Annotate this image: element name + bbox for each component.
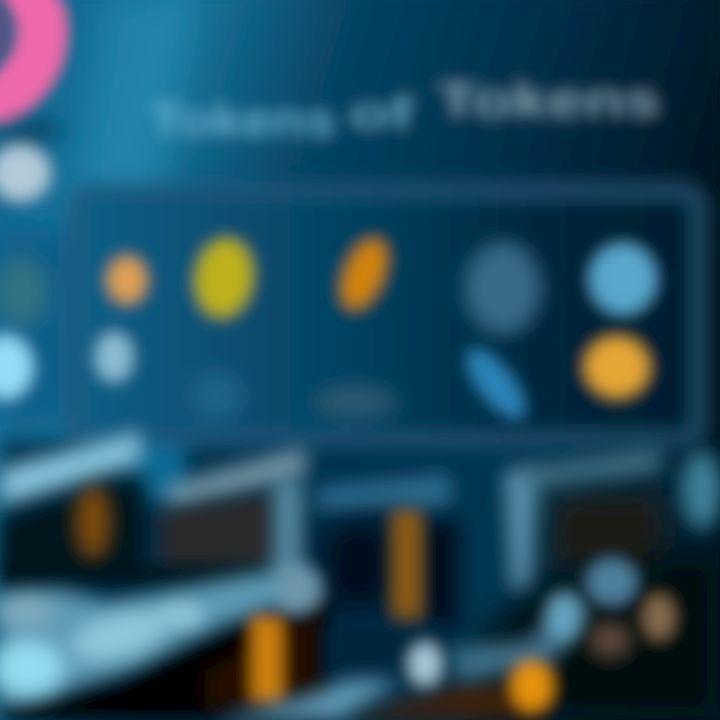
block: blue right of bar bbox=[325, 620, 445, 680]
icon: dark orange token bbox=[331, 231, 397, 317]
pillar: right bbox=[505, 470, 538, 590]
title: Tokens bbox=[150, 94, 335, 146]
node: top blue bbox=[586, 558, 638, 606]
darkness: lower left band bbox=[0, 565, 260, 585]
node: gold coin bbox=[510, 660, 554, 712]
node: tan left bbox=[588, 622, 632, 658]
icon: orange token bbox=[107, 256, 147, 304]
node: tan right bbox=[642, 593, 676, 641]
icon: teal-green glow bbox=[0, 256, 48, 328]
icon: gold coin bbox=[584, 336, 650, 398]
label placeholder: token one bbox=[190, 372, 242, 420]
brown strip: bottom bbox=[340, 680, 540, 720]
ledge: second bbox=[165, 448, 305, 508]
block: brown bbox=[160, 492, 275, 568]
icon: light blue glow bbox=[0, 335, 33, 399]
ledge: right bbox=[520, 448, 660, 490]
icon: yellow token bbox=[190, 234, 258, 322]
block: dark middle bbox=[322, 515, 395, 610]
glow: cluster mid bbox=[66, 601, 174, 669]
label placeholder: token two bbox=[313, 384, 397, 420]
glow: cluster upper left bbox=[0, 594, 55, 626]
icon: pink ring bbox=[0, 0, 70, 145]
block: dark beside amber bbox=[420, 520, 458, 630]
icon: white cloud bbox=[0, 145, 50, 201]
icon: sky blue token bbox=[589, 243, 657, 315]
bar: amber middle bbox=[392, 510, 422, 625]
bar: amber left bbox=[76, 484, 110, 560]
block: brown under bar bbox=[205, 610, 320, 710]
ledge: left top bbox=[0, 432, 140, 505]
node: pillar foot bbox=[274, 564, 322, 616]
glow: cluster right bbox=[155, 601, 205, 629]
title: Tokens bbox=[438, 74, 660, 126]
node: mid blue bbox=[546, 593, 580, 641]
node: blue path bbox=[450, 590, 590, 680]
panel: token icons bbox=[74, 190, 700, 440]
darkness: lower right bbox=[480, 550, 720, 720]
title bbox=[150, 74, 660, 146]
ledge: bottom centre bbox=[210, 680, 400, 720]
pillar: second bbox=[275, 480, 301, 580]
darkness: bottom left bbox=[0, 600, 330, 720]
ledge cluster: lower left bbox=[0, 570, 300, 705]
glow: lower-left highlight bbox=[0, 640, 64, 696]
icon: slate blue token bbox=[465, 242, 541, 334]
icon: pale blue token bbox=[95, 332, 133, 382]
node: white bbox=[408, 642, 442, 686]
ledge: middle bbox=[318, 474, 450, 512]
icon: blue capsule bbox=[457, 340, 535, 428]
bar: bright amber bbox=[250, 616, 284, 702]
block: dark left bbox=[0, 472, 145, 580]
glow: right edge bbox=[682, 452, 720, 528]
title: of bbox=[350, 89, 413, 138]
bottom scene: bars and ledges bbox=[0, 432, 720, 720]
block: right brown bbox=[552, 495, 662, 570]
